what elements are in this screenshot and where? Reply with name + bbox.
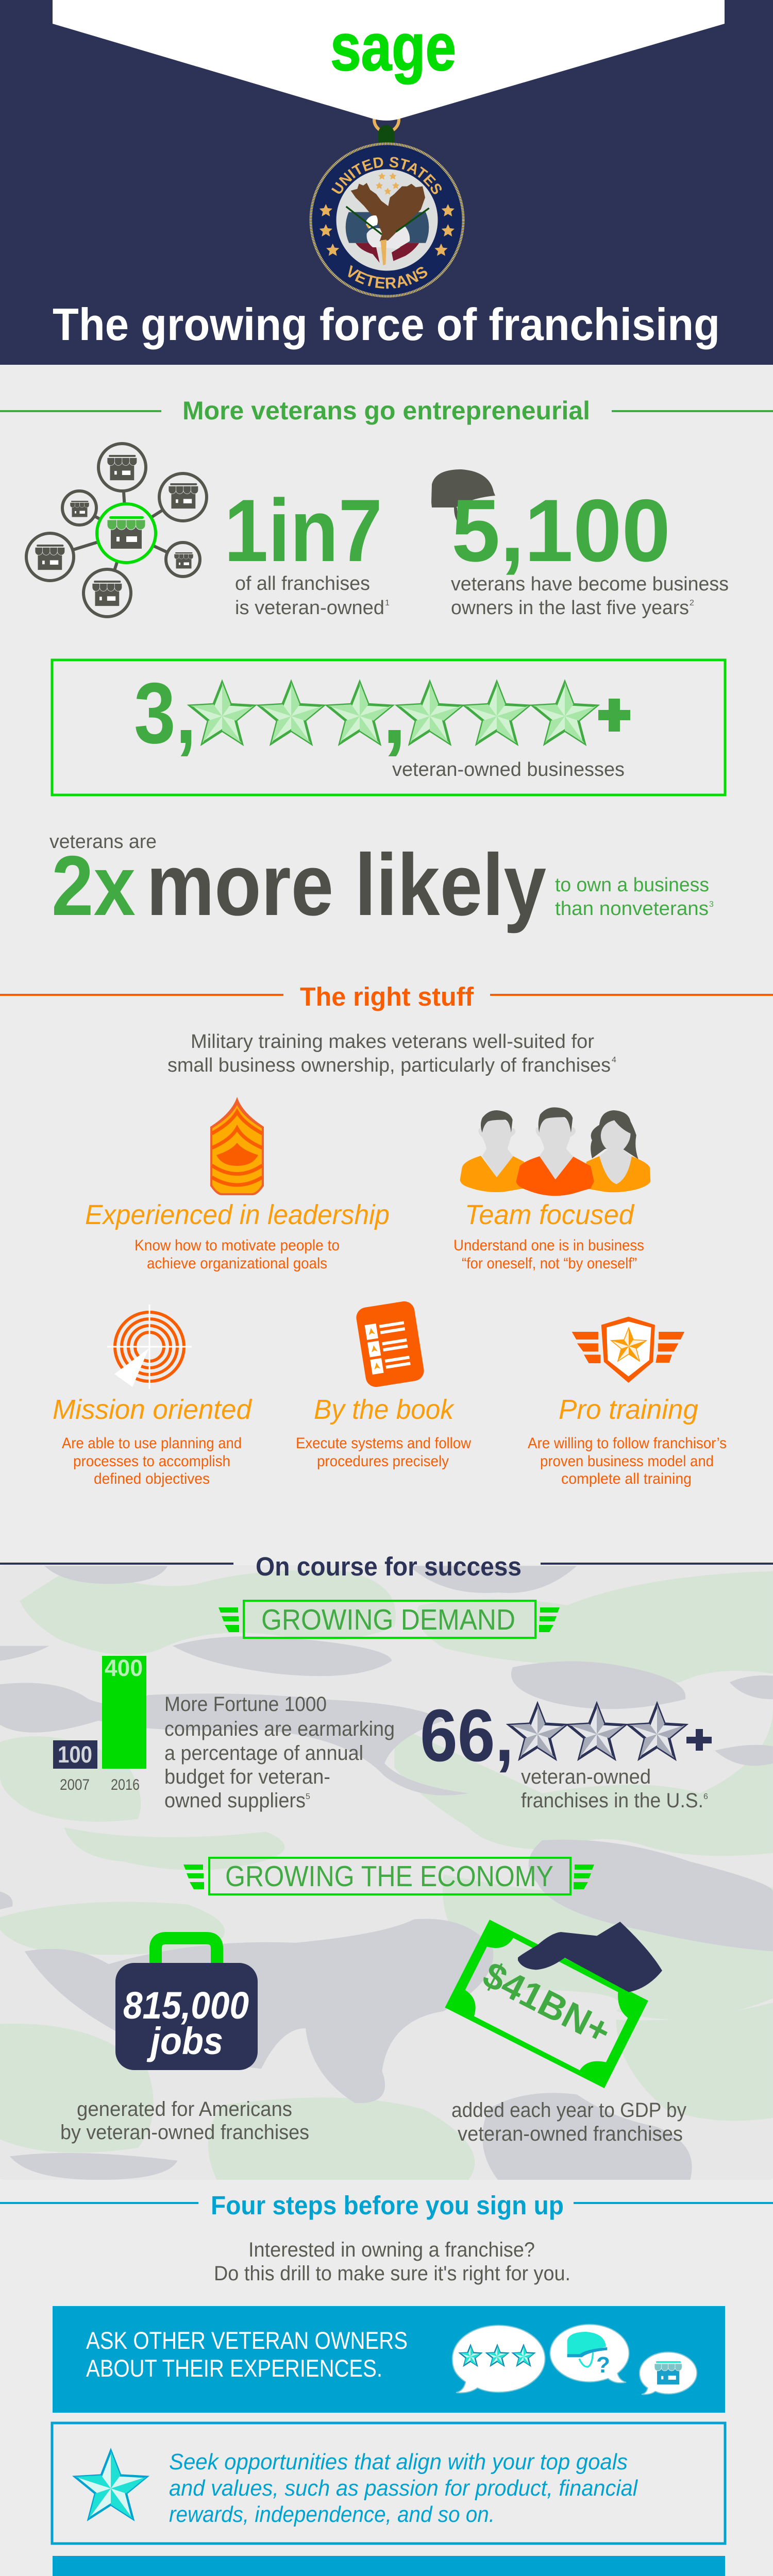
trait: by the book: procedures precisely (317, 1453, 449, 1470)
trait: by the book (296, 1394, 471, 1470)
speech bubbles icon: ? (596, 2352, 610, 2378)
stat: 1 in 7 (224, 481, 390, 619)
stat: 2x more likely: to own a business (555, 874, 709, 896)
trait: pro training: complete all training (561, 1470, 692, 1487)
icon: briefcase with jobs: 815,000 (123, 1984, 249, 2027)
icon: team of three people (460, 1107, 650, 1196)
veterans medal (309, 142, 465, 298)
trait: team focused: Team focused (465, 1199, 635, 1230)
text: fortune 1000: budget for veteran- (164, 1766, 330, 1788)
bar chart: fortune 1000 suppliers: 2016 (111, 1776, 140, 1793)
stat digits: 3, (134, 665, 196, 761)
stat: 2x more likely: veterans are (49, 831, 157, 853)
stat: 1 in 7: 1 (385, 599, 390, 607)
icon: banknote and hand: $41BN+ (476, 1954, 617, 2053)
bar chart: fortune 1000 suppliers: 2007 (60, 1776, 90, 1793)
panel: step 2 seek opportunities (52, 2423, 725, 2544)
trait: team focused: Understand one is in business (453, 1237, 644, 1254)
trait: mission oriented (53, 1394, 253, 1487)
panel: step 2 seek opportunities: Seek opportunities that align with your top goals (169, 2449, 628, 2475)
icon: helmet (431, 469, 495, 527)
stat: 5,100 (451, 481, 729, 619)
text: gdp added (451, 2099, 686, 2145)
white pennant (53, 0, 725, 121)
banner: growing demand: GROWING DEMAND (261, 1603, 515, 1636)
stat: 2x more likely: 2x (52, 838, 136, 933)
text: fortune 1000: 5 (306, 1792, 310, 1801)
trait: mission oriented: defined objectives (94, 1470, 210, 1487)
icon: briefcase with jobs (115, 1938, 258, 2070)
medal ribbon (378, 125, 394, 143)
main title: The growing force of franchising (53, 299, 720, 350)
icon: banknote and hand (445, 1920, 662, 2088)
panel: step 1 ask owners: ASK OTHER VETERAN OWNERS (86, 2327, 408, 2354)
stat: 66,000+: 66, (420, 1694, 514, 1777)
seal text: united states: UNITED STATES (331, 157, 442, 194)
seal eagle art (320, 173, 455, 265)
intro text: drill: Interested in owning a franchise? (248, 2239, 535, 2261)
trait: pro training (528, 1394, 727, 1487)
intro text: military training (167, 1031, 616, 1076)
stat: 66,000+: veteran-owned (521, 1766, 651, 1788)
trait: mission oriented: Mission oriented (53, 1394, 253, 1425)
header band (0, 0, 773, 365)
stat: 66,000+: franchises in the U.S. (521, 1789, 703, 1812)
panel: step 1 ask owners: ABOUT THEIR EXPERIENCES. (86, 2354, 382, 2382)
text: fortune 1000 (164, 1693, 395, 1812)
text: fortune 1000: a percentage of annual (164, 1742, 363, 1765)
trait: experienced in leadership (85, 1199, 390, 1272)
plus sign (598, 699, 630, 732)
stat: 1 in 7: of all franchises (235, 573, 370, 595)
medal ring (374, 107, 399, 132)
panel: step 2 seek opportunities: and values, such as passion for product, financial (169, 2476, 638, 2501)
bar chart: fortune 1000 suppliers: 100 (58, 1741, 92, 1768)
trait: by the book: By the book (314, 1394, 455, 1425)
trait: pro training: proven business model and (540, 1453, 714, 1470)
trait: experienced in leadership: achieve organizational goals (147, 1255, 327, 1272)
stat: 2x more likely: more likely (146, 836, 546, 934)
trait: pro training: Are willing to follow franchisor’s (528, 1435, 727, 1452)
intro text: drill: Do this drill to make sure it's right for you. (214, 2262, 570, 2285)
icon: target (107, 1304, 192, 1389)
stat: 1 in 7: is veteran-owned (235, 597, 384, 619)
trait: experienced in leadership: Know how to motivate people to (135, 1237, 340, 1254)
trait: pro training: Pro training (559, 1394, 698, 1425)
intro text: military training: small business ownership, particularly of franchises (167, 1055, 611, 1076)
text: jobs generated: by veteran-owned franchises (60, 2121, 309, 2144)
stat: 5,100: veterans have become business (451, 573, 729, 595)
section heading: more veterans: More veterans go entrepreneurial (182, 396, 590, 425)
text: fortune 1000: More Fortune 1000 (164, 1693, 327, 1716)
panel: step 1 ask owners (53, 2306, 725, 2413)
intro text: military training: 4 (612, 1056, 616, 1064)
banner: growing the economy: GROWING THE ECONOMY (225, 1860, 553, 1893)
bar chart: fortune 1000 suppliers: 400 (105, 1655, 143, 1681)
speech bubbles icon (452, 2325, 697, 2395)
icon: briefcase with jobs: jobs (147, 2020, 223, 2062)
stat: 5,100: 5,100 (451, 481, 670, 580)
stat: 2x more likely: 3 (709, 900, 714, 909)
text: fortune 1000: owned suppliers (164, 1789, 306, 1812)
icon: franchise network (26, 444, 207, 617)
icon: sergeant chevron (210, 1097, 264, 1195)
camouflage background (0, 1565, 773, 2180)
bar chart: fortune 1000 suppliers (53, 1655, 146, 1793)
caption: veteran-owned businesses (392, 759, 625, 781)
intro text: military training: Military training makes veterans well-suited for (191, 1031, 594, 1053)
stat: 2x more likely: than nonveterans (555, 898, 709, 920)
trait: team focused: “for oneself, not “by oneself” (462, 1255, 637, 1272)
text: gdp added: added each year to GDP by (451, 2099, 686, 2122)
section heading: on course for success: On course for success (256, 1552, 522, 1581)
trait: team focused (453, 1199, 644, 1272)
trait: mission oriented: Are able to use planning and (62, 1435, 242, 1452)
icon: winged badge (572, 1317, 684, 1383)
seal text: veterans: VETERANS (348, 265, 428, 289)
text: jobs generated: generated for Americans (77, 2098, 292, 2121)
stat: 66,000+ (420, 1694, 712, 1812)
panel: step 2 seek opportunities: rewards, independence, and so on. (169, 2502, 495, 2527)
text: gdp added: veteran-owned franchises (458, 2123, 683, 2145)
trait: experienced in leadership: Experienced in leadership (85, 1199, 390, 1230)
trait: mission oriented: processes to accomplish (73, 1453, 230, 1470)
stat: 66,000+: 6 (703, 1792, 708, 1801)
panel: step 3 learn more (53, 2556, 725, 2576)
stat: 5,100: owners in the last five years (451, 597, 689, 619)
stat: 5,100: 2 (690, 599, 694, 607)
stat: 2x more likely (49, 831, 714, 934)
section heading: four steps: Four steps before you sign up (211, 2191, 564, 2220)
star zeros (190, 683, 597, 743)
text: jobs generated (60, 2098, 309, 2144)
section heading: the right stuff: The right stuff (300, 982, 474, 1011)
sage logo: sage (330, 9, 456, 84)
icon: checklist book (355, 1300, 426, 1388)
trait: by the book: Execute systems and follow (296, 1435, 471, 1452)
panel: 3,000,000+ businesses (52, 660, 725, 795)
stat: 1 in 7: 1in7 (224, 481, 382, 580)
intro text: drill (214, 2239, 570, 2285)
text: fortune 1000: companies are earmarking (164, 1718, 395, 1740)
second comma: , (382, 665, 407, 761)
